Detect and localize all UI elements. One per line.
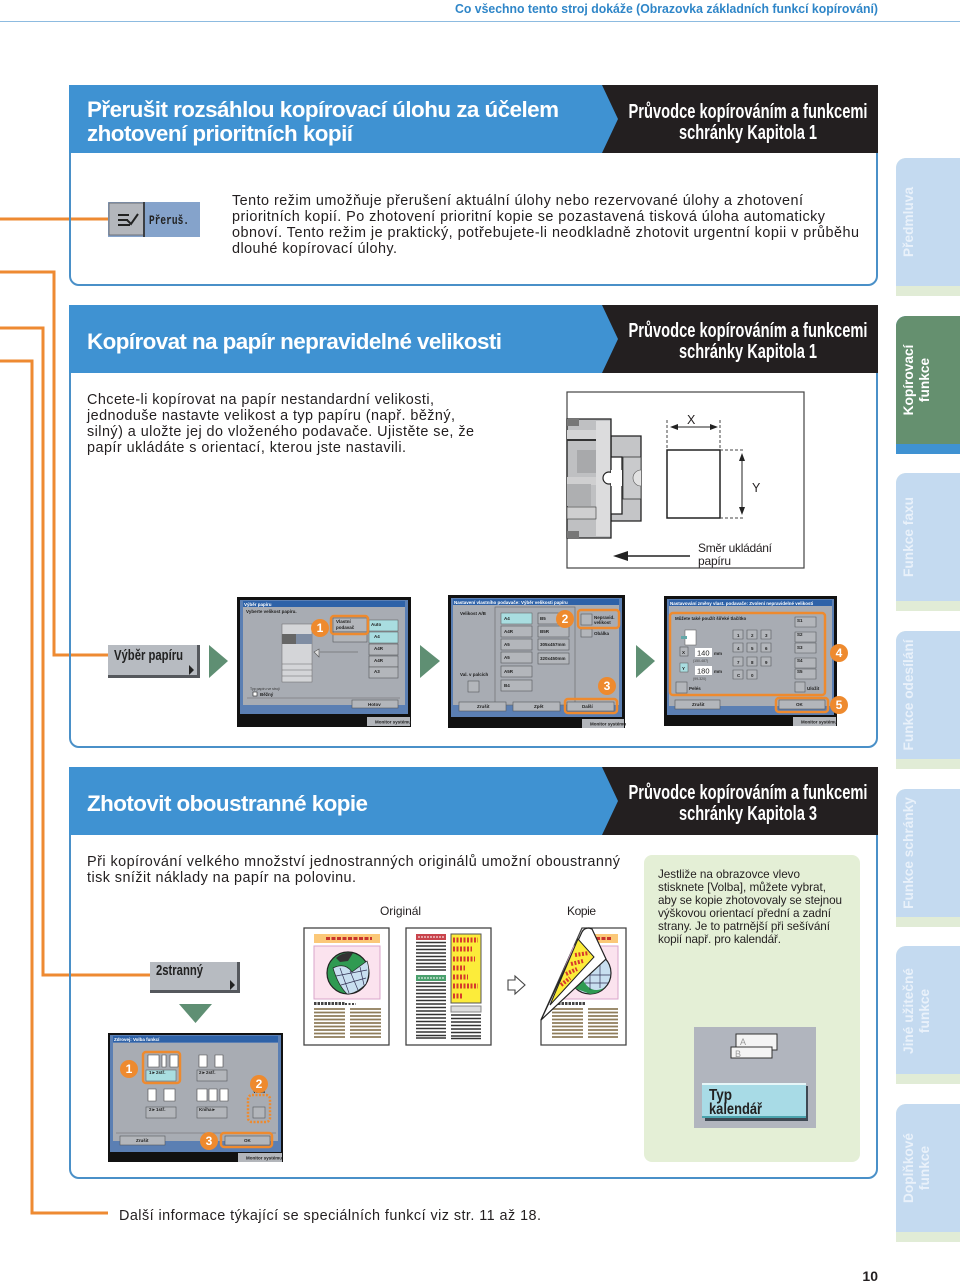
screen 3: custom size: 0 bbox=[751, 673, 754, 678]
screen 1: paper selection: Běžný bbox=[260, 692, 274, 697]
guide reference: chapter 3: schránky Kapitola 3 bbox=[679, 803, 817, 825]
button: paper selection: Výběr papíru bbox=[114, 647, 183, 664]
screen 1: paper selection: A3 bbox=[374, 669, 380, 674]
screen 2: size selection: velikost bbox=[594, 620, 611, 625]
screen 3: custom size: (99-320) bbox=[693, 677, 706, 681]
screen 3: custom size: Monitor systému bbox=[801, 720, 837, 724]
screen 2: size selection: A4 bbox=[504, 616, 510, 621]
screen 3: custom size: 9 bbox=[765, 660, 768, 665]
step badge 2: 2 bbox=[256, 1077, 263, 1091]
screen 3: custom size: S2 bbox=[797, 632, 803, 637]
screen 3: custom size: 8 bbox=[751, 660, 754, 665]
screen 2: size selection: Nepravid. bbox=[594, 615, 615, 620]
step badge 5: 5 bbox=[836, 698, 843, 712]
body text: interrupt: Tento režim umožňuje přerušení aktuální úlohy nebo rezervované úlohy a zhotovení bbox=[232, 193, 803, 209]
diagram: paper feeder and size: papíru bbox=[698, 554, 731, 568]
screen 3: custom size: S5 bbox=[797, 669, 803, 674]
tip text: Jestliže na obrazovce vlevo bbox=[658, 868, 800, 881]
screen 3: custom size bbox=[664, 596, 848, 726]
screen 3: custom size: mm bbox=[714, 651, 722, 656]
page: original side 1 bbox=[304, 928, 389, 1045]
step badge 3: 3 bbox=[206, 1134, 213, 1148]
tab: copy functions (active): funkce bbox=[917, 358, 932, 402]
highlight 1 bbox=[331, 616, 368, 634]
tab: other useful bbox=[896, 946, 960, 1084]
screen 3: custom size: C bbox=[737, 673, 741, 678]
step badge 5 bbox=[830, 696, 848, 714]
screen: duplex type: OK bbox=[244, 1138, 252, 1143]
step badge 1 bbox=[311, 619, 329, 637]
screen 1: paper selection: Vyberte velikost papíru. bbox=[246, 609, 297, 614]
tip text: kopií např. pro kalendář. bbox=[658, 933, 781, 946]
screen 2: size selection: A5 bbox=[504, 655, 510, 660]
screen 1: paper selection: Hotov bbox=[368, 702, 381, 707]
button: 2-sided bbox=[150, 962, 240, 993]
highlight 1 bbox=[143, 1052, 180, 1083]
icon: hollow arrow bbox=[508, 976, 525, 994]
tab: supplementary bbox=[896, 1104, 960, 1242]
tab: supplementary: Doplňkové bbox=[901, 1133, 916, 1203]
step badge 3 bbox=[200, 1132, 218, 1150]
screen 2: size selection: Nastavení vlastního podavače: Výběr velikosti papíru bbox=[454, 600, 568, 605]
screen 1: paper selection: A4 bbox=[374, 634, 380, 639]
screen 1: paper selection: Vlastní bbox=[336, 619, 352, 624]
screen 1: paper selection: A4R bbox=[374, 658, 384, 663]
tab: supplementary: funkce bbox=[917, 1146, 932, 1190]
button: 2-sided: 2stranný bbox=[156, 962, 203, 979]
screen 3: custom size: Y bbox=[682, 666, 685, 671]
body text: irregular paper: papír ukládáte s orientací, kterou jste nastavili. bbox=[87, 440, 406, 456]
screen 3: custom size: 7 bbox=[737, 660, 740, 665]
highlight 2 bbox=[578, 610, 619, 628]
screen 3: custom size: S1 bbox=[797, 618, 803, 623]
tip text: stisknete [Volba], můžete vybrat, bbox=[658, 881, 826, 894]
heading: interrupt: Přerušit rozsáhlou kopírovací úlohu za účelem bbox=[87, 97, 559, 122]
screen: duplex type: Zdrovej: Volba funkcí bbox=[114, 1037, 160, 1042]
screen 3: custom size: 6 bbox=[765, 646, 768, 651]
highlight 3 bbox=[221, 1133, 272, 1147]
screen: duplex type: 2►2stř. bbox=[199, 1070, 215, 1075]
guide reference: chapter 1: Průvodce kopírováním a funkcemi bbox=[628, 101, 868, 123]
heading: interrupt: zhotovení prioritních kopií bbox=[87, 121, 354, 146]
body text: interrupt: obnoví. Tento režim je praktický, potřebujete-li neodkladně zhotovit urgentní kopii v průběhu bbox=[232, 225, 859, 241]
screen 2: size selection: B5 bbox=[540, 616, 546, 621]
step badge 3: 3 bbox=[604, 679, 611, 693]
screen 3: custom size: 180 bbox=[697, 666, 710, 676]
screen 3: custom size: Nastavování změny vlast. podavače: Zvolení nepravidelné velikosti bbox=[670, 601, 813, 606]
body text: interrupt: prioritních kopií. Po zhotovení prioritní kopie se pozastavená tisková úloha automaticky bbox=[232, 209, 826, 225]
screen: duplex type: 1►2stř. bbox=[149, 1070, 165, 1075]
screen 3: custom size: 140 bbox=[697, 648, 710, 658]
screen 3: custom size: Pelés bbox=[689, 686, 701, 691]
tab: fax bbox=[896, 473, 960, 611]
tab: preface: Předmluva bbox=[901, 187, 916, 257]
step badge 4 bbox=[830, 644, 848, 662]
calendar type option: Typ bbox=[709, 1087, 732, 1104]
body text: duplex: tisk snížit náklady na papír na polovinu. bbox=[87, 870, 356, 886]
screen 3: custom size: mm bbox=[714, 669, 722, 674]
diagram: paper feeder and size: X bbox=[687, 413, 696, 427]
screen 2: size selection: B4 bbox=[504, 683, 510, 688]
screen 1: paper selection: Monitor systému bbox=[375, 720, 411, 724]
screen 1: paper selection: Auto bbox=[371, 622, 381, 627]
step badge 1 bbox=[120, 1060, 138, 1078]
screen 3: custom size: X bbox=[682, 650, 685, 655]
step badge 1: 1 bbox=[317, 621, 324, 635]
tab: send bbox=[896, 631, 960, 769]
screen 2: size selection: Monitor systému bbox=[590, 722, 626, 726]
screen 3: custom size: 3 bbox=[765, 633, 768, 638]
step badge 2: 2 bbox=[562, 612, 569, 626]
highlight 2 bbox=[248, 1095, 270, 1122]
step badge 4: 4 bbox=[836, 646, 843, 660]
screen: duplex type: Monitor systému bbox=[246, 1156, 282, 1160]
page: original side 2 bbox=[406, 928, 491, 1045]
tip text: výškovou orientací přední a zadní bbox=[658, 907, 832, 920]
screen 1: paper selection: podavač bbox=[336, 625, 355, 630]
tab: copy functions (active): Kopírovací bbox=[901, 343, 916, 415]
screen 2: size selection: A4R bbox=[504, 629, 514, 634]
step badge 3 bbox=[598, 677, 616, 695]
step badge 1: 1 bbox=[126, 1062, 133, 1076]
guide reference: chapter 1: Průvodce kopírováním a funkcemi bbox=[628, 320, 868, 342]
step badge 2 bbox=[250, 1075, 268, 1093]
arrow bbox=[636, 645, 655, 678]
screen 1: paper selection: Typ papíru ve stroji bbox=[250, 687, 280, 691]
calendar type option bbox=[694, 1027, 816, 1128]
tip text: aby se kopie zhotovovaly se stejnou bbox=[658, 894, 842, 907]
arrow bbox=[209, 645, 228, 678]
calendar type option: A bbox=[740, 1037, 746, 1047]
screen 3: custom size: 4 bbox=[737, 646, 740, 651]
tab: other useful: funkce bbox=[917, 989, 932, 1033]
footer note: Další informace týkající se speciálních funkcí viz str. 11 až 18. bbox=[119, 1208, 541, 1224]
orange connector lines bbox=[0, 219, 150, 1213]
guide reference: chapter 1: schránky Kapitola 1 bbox=[679, 122, 817, 144]
heading: duplex: Zhotovit oboustranné kopie bbox=[87, 791, 368, 816]
body text: irregular paper: silný) a uložte jej do vloženého podavače. Ujistěte se, že bbox=[87, 424, 474, 440]
screen 2: size selection: Zpět bbox=[534, 704, 544, 709]
screen 2: size selection: Obálka bbox=[594, 631, 610, 636]
label: copy: Kopie bbox=[567, 904, 596, 918]
tab: send: Funkce odesílání bbox=[901, 638, 916, 751]
body text: irregular paper: jednoduše nastavte velikost a typ papíru (např. běžný, bbox=[86, 408, 455, 424]
screen 2: size selection: B5R bbox=[540, 629, 550, 634]
highlight 5 bbox=[776, 698, 828, 712]
screen 3: custom size: S4 bbox=[797, 658, 803, 663]
screen 1: paper selection: Výběr papíru bbox=[244, 602, 272, 607]
screen 3: custom size: OK bbox=[796, 702, 804, 707]
screen 2: size selection: A5R bbox=[504, 669, 514, 674]
body text: interrupt: dlouhé kopírovací úlohy. bbox=[232, 241, 397, 257]
screen: duplex type bbox=[108, 1033, 283, 1162]
screen 1: paper selection bbox=[237, 597, 411, 727]
diagram: paper feeder and size: Směr ukládání bbox=[698, 541, 773, 555]
panel: interrupt copying bbox=[69, 85, 878, 285]
panel: irregular paper bbox=[69, 305, 878, 747]
body text: duplex: Při kopírování velkého množství jednostranných originálů umožní oboustranný bbox=[87, 854, 621, 870]
screen 3: custom size: 5 bbox=[751, 646, 754, 651]
screen 2: size selection bbox=[448, 595, 626, 728]
screen 3: custom size: Zrušit bbox=[692, 702, 705, 707]
screen 2: size selection: Další bbox=[582, 704, 594, 709]
screen 3: custom size: S3 bbox=[797, 645, 803, 650]
panel: green tip box bbox=[644, 855, 860, 1162]
diagram: paper feeder and size bbox=[567, 392, 804, 568]
screen: duplex type: 2►1stř. bbox=[149, 1107, 165, 1112]
tab: mailbox: Funkce schránky bbox=[901, 797, 916, 909]
screen 2: size selection: 305x457mm bbox=[540, 642, 566, 647]
tip text: strany. Je to patrnější při sešívání bbox=[658, 920, 831, 933]
screen 2: size selection: 320x450mm bbox=[540, 656, 566, 661]
screen 3: custom size: Uložit bbox=[807, 686, 820, 691]
screen 3: custom size: 1 bbox=[737, 633, 740, 638]
icon: interrupt button bbox=[108, 202, 200, 237]
diagram: paper feeder and size: Y bbox=[752, 481, 761, 495]
screen: duplex type: Volba bbox=[253, 1089, 265, 1094]
calendar type option: B bbox=[735, 1049, 741, 1059]
body text: irregular paper: Chcete-li kopírovat na papír nestandardní velikosti, bbox=[87, 392, 434, 408]
page: duplex copy bbox=[541, 928, 626, 1045]
screen: duplex type: Kniha► bbox=[199, 1107, 216, 1112]
highlight 4 bbox=[670, 613, 825, 695]
screen: duplex type: Zrušit bbox=[136, 1138, 149, 1143]
screen 3: custom size: Můžete také použít šířeké tlačítko bbox=[675, 615, 747, 621]
button: paper selection bbox=[108, 645, 200, 678]
tab: other useful: Jiné užitečné bbox=[901, 968, 916, 1054]
screen 2: size selection: Zrušit bbox=[477, 704, 490, 709]
guide reference: chapter 1: schránky Kapitola 1 bbox=[679, 341, 817, 363]
screen 3: custom size: (150-487) bbox=[693, 659, 708, 663]
tab: preface bbox=[896, 158, 960, 296]
calendar type option: kalendář bbox=[709, 1101, 763, 1118]
arrow bbox=[179, 1004, 212, 1023]
running header: Co všechno tento stroj dokáže (Obrazovka základních funkcí kopírování) bbox=[455, 2, 878, 16]
label: original: Originál bbox=[380, 904, 421, 918]
arrow bbox=[420, 645, 440, 678]
tab: fax: Funkce faxu bbox=[901, 497, 916, 577]
screen 2: size selection: Val. v palcích bbox=[460, 672, 489, 677]
screen 3: custom size: 2 bbox=[751, 633, 754, 638]
screen 1: paper selection: A4R bbox=[374, 646, 384, 651]
highlight 3 bbox=[565, 699, 617, 713]
screen 2: size selection: Velikost A/B bbox=[460, 611, 487, 616]
heading: irregular paper: Kopírovat na papír nepravidelné velikosti bbox=[87, 329, 502, 354]
step badge 2 bbox=[556, 610, 574, 628]
icon: interrupt button: Přeruš. bbox=[149, 213, 189, 228]
tab: copy functions (active) bbox=[896, 316, 960, 454]
screen 2: size selection: A5 bbox=[504, 642, 510, 647]
guide reference: chapter 3: Průvodce kopírováním a funkcemi bbox=[628, 782, 868, 804]
tab: mailbox bbox=[896, 789, 960, 927]
